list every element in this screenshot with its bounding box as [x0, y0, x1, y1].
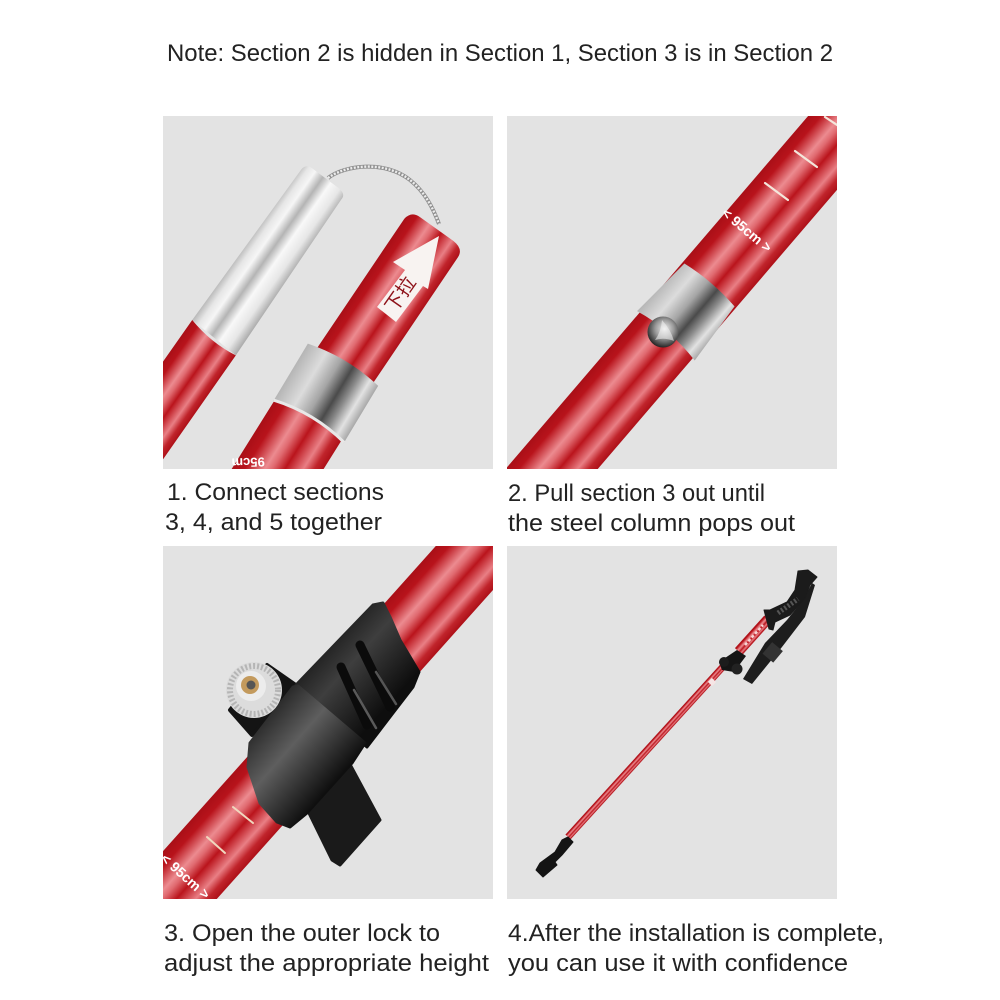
caption: step 1: 1. Connect sections: [167, 479, 384, 506]
scale ticks: [207, 807, 253, 853]
grip handle: [764, 570, 817, 630]
lock lever: [305, 755, 380, 865]
lower lock sleeve: [248, 686, 365, 827]
pole tip: [536, 837, 573, 877]
silver inner tube: [190, 162, 349, 355]
knob bracket: [230, 665, 300, 735]
panel: step 3 photo: [163, 546, 493, 899]
caption: step 4: [508, 920, 884, 977]
panel: step 2 photo: [507, 116, 837, 469]
caption: step 4: 4.After the installation is complete,: [508, 920, 884, 947]
steel cable: [328, 167, 439, 224]
adjusting knob: [226, 662, 282, 718]
caption: step 1: 3, 4, and 5 together: [165, 509, 382, 536]
caption: step 3: 3. Open the outer lock to: [164, 920, 440, 947]
caption: step 3: adjust the appropriate height: [164, 950, 489, 977]
caption: step 4: you can use it with confidence: [508, 950, 848, 977]
metal collar: [637, 264, 734, 360]
pole lock: [719, 650, 746, 674]
wrist strap: [743, 583, 815, 684]
95cm scale label: < 95cm >: [719, 205, 775, 255]
caption: step 2: the steel column pops out: [508, 510, 795, 537]
red tube: [507, 116, 837, 469]
95cm scale label: < 95cm >: [158, 850, 213, 902]
red tube: [163, 546, 493, 899]
caption: step 2: [508, 480, 795, 537]
scale ticks: [765, 117, 837, 200]
pull arrow with label: 下拉: [381, 273, 421, 316]
caption: step 2: 2. Pull section 3 out until: [508, 480, 765, 507]
printed scale text fragment: 95cm: [231, 454, 265, 471]
caption: step 3: [164, 920, 489, 977]
steel push button: [648, 316, 678, 348]
lower left red section: [163, 320, 236, 460]
lower right red section: [232, 402, 341, 469]
metal collar: [273, 340, 380, 443]
note heading: Note: Section 2 is hidden in Section 1, Section 3 is in Section 2: [167, 40, 833, 67]
caption: step 1: [165, 479, 384, 536]
right red tube: [318, 214, 460, 382]
pull arrow with label: [377, 236, 439, 322]
panel: step 1 photo: [163, 116, 493, 469]
panel: step 4 photo: [507, 546, 837, 899]
trekking pole shaft: [565, 615, 772, 839]
upper lock sleeve: [296, 603, 419, 747]
